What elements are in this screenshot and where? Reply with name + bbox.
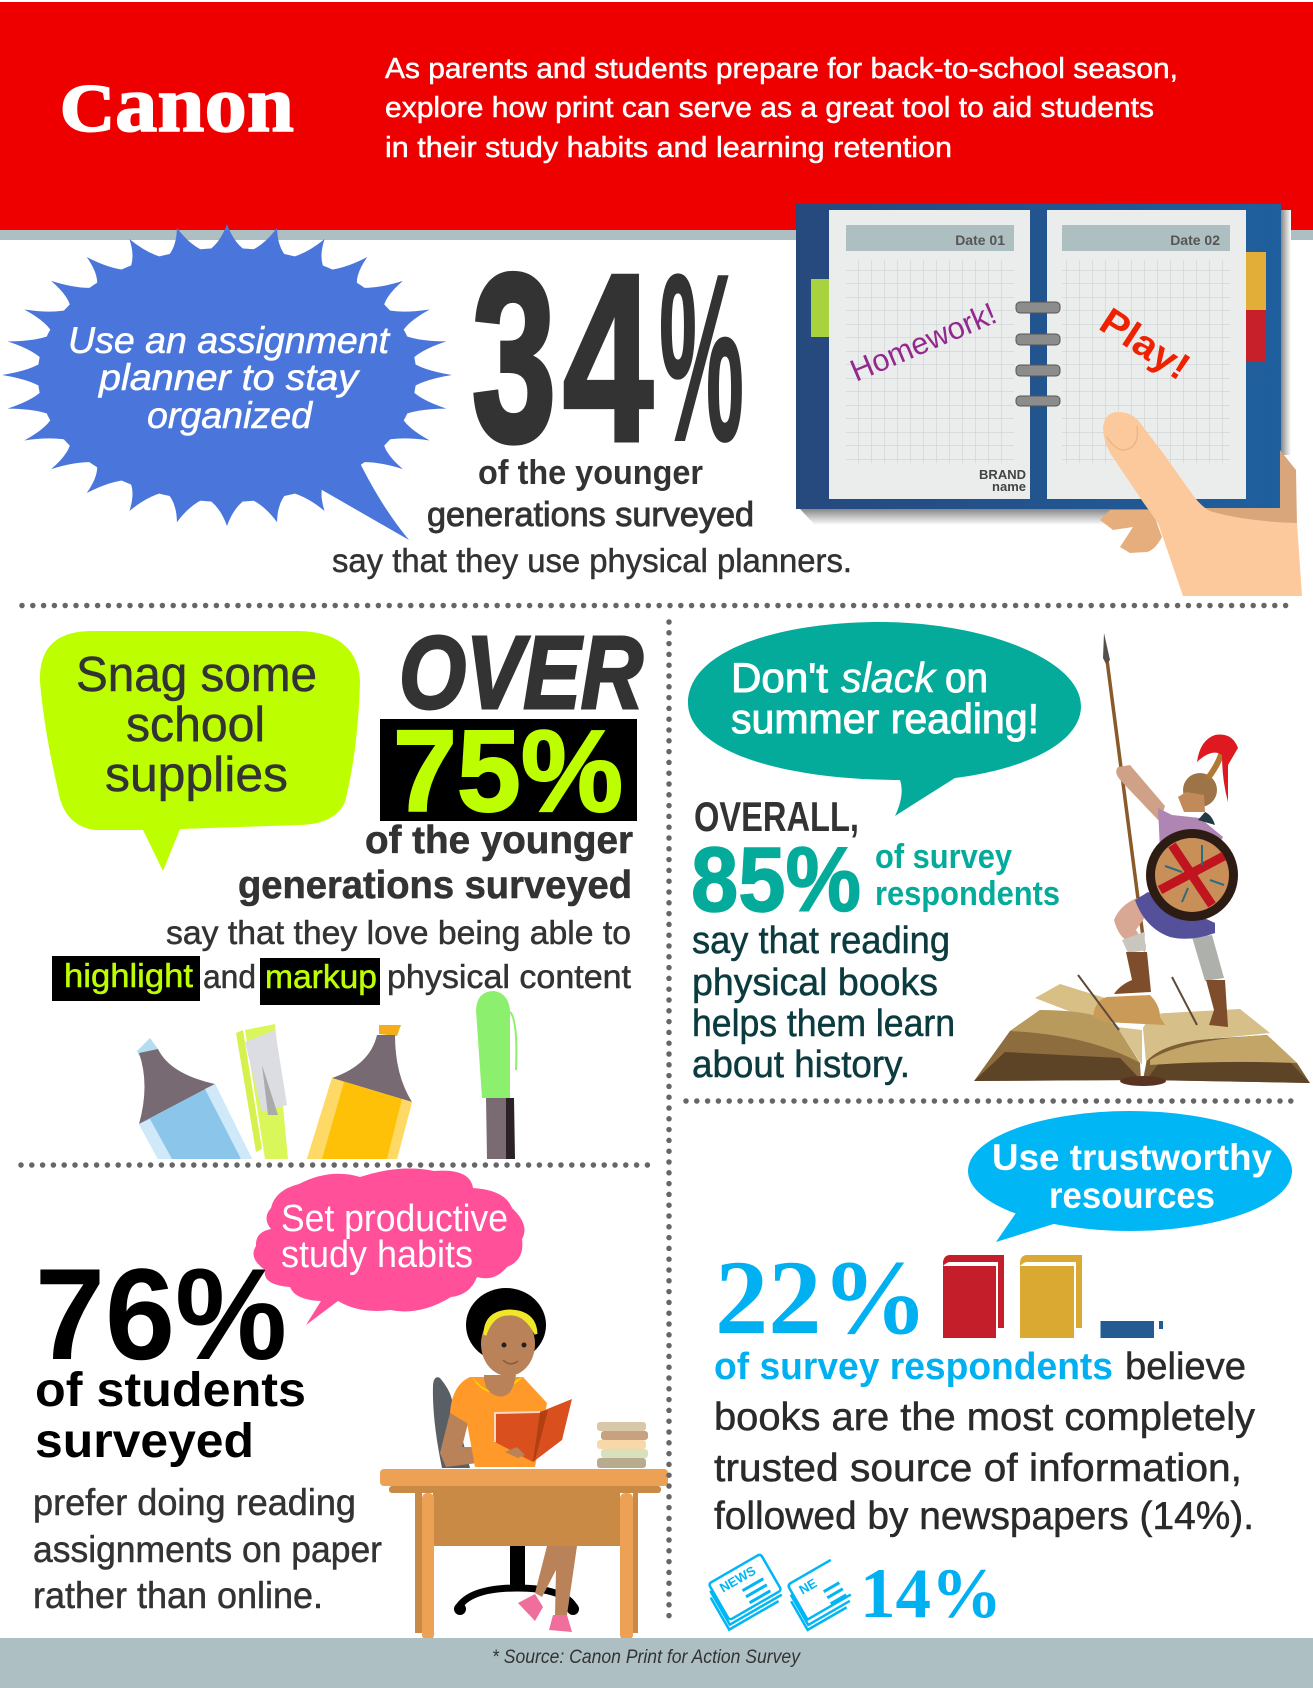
lime speech bubble bbox=[40, 631, 360, 871]
icon: warrior standing on an open book bbox=[974, 633, 1310, 1086]
starburst callout bbox=[2, 224, 452, 540]
cyan speech bubble: resources bbox=[1049, 1175, 1215, 1216]
icon: planner held by a hand: name bbox=[992, 479, 1026, 494]
reading statistic text: helps them learn bbox=[692, 1003, 955, 1045]
planner statistic text: of the younger bbox=[478, 454, 703, 492]
pink cloud bubble: Set productive bbox=[281, 1198, 508, 1240]
34% statistic bbox=[472, 226, 744, 491]
footer source note bbox=[0, 1638, 1313, 1688]
respondents label bbox=[875, 838, 1060, 913]
75% statistic: 75% bbox=[393, 706, 623, 836]
students label: of students bbox=[35, 1364, 306, 1417]
book stack bbox=[597, 1422, 648, 1468]
76% statistic: 76% bbox=[35, 1241, 287, 1387]
34% statistic: 3 bbox=[472, 226, 556, 491]
supplies statistic text: physical content bbox=[387, 958, 631, 995]
planner statistic text: generations surveyed bbox=[427, 496, 754, 534]
OVERALL heading: OVERALL, bbox=[694, 793, 859, 840]
header intro text: explore how print can serve as a great tool to aid students bbox=[385, 92, 1154, 124]
panel: planner tip: % bbox=[659, 226, 744, 491]
supplies statistic text: generations surveyed bbox=[238, 864, 632, 907]
icon: fallen book bbox=[1100, 1321, 1163, 1338]
teal speech bubble: summer reading! bbox=[731, 695, 1039, 742]
lime speech bubble: supplies bbox=[105, 748, 288, 802]
Canon logo: anon bbox=[115, 61, 294, 149]
teal speech bubble: on bbox=[945, 654, 988, 701]
icon: clipped newspaper: NE bbox=[796, 1575, 820, 1597]
supplies statistic text: and bbox=[203, 958, 256, 995]
desk bbox=[380, 1469, 668, 1640]
arrows bbox=[1078, 975, 1197, 1030]
icon: planner held by a hand: Play! bbox=[1092, 300, 1197, 389]
icon: red book bbox=[943, 1255, 1004, 1338]
panel: summer reading bbox=[688, 622, 1310, 1086]
starburst callout: Use an assignment bbox=[68, 320, 391, 361]
students label bbox=[35, 1364, 306, 1468]
trust statistic text bbox=[714, 1346, 1256, 1538]
highlight tag: highlight bbox=[64, 957, 193, 994]
student legs bbox=[535, 1546, 577, 1615]
pink cloud bubble bbox=[253, 1169, 524, 1325]
icon: planner held by a hand: Homework! bbox=[845, 296, 1001, 388]
OVER heading: OVER bbox=[399, 615, 643, 730]
icon: planner held by a hand bbox=[796, 204, 1302, 596]
student body bbox=[440, 1413, 517, 1467]
starburst callout: organized bbox=[147, 395, 313, 436]
trust statistic text: trusted source of information, bbox=[714, 1447, 1242, 1490]
panel: school supplies bbox=[40, 615, 643, 1159]
trust statistic text: followed by newspapers (14%). bbox=[714, 1495, 1254, 1538]
study statistic text bbox=[33, 1482, 382, 1616]
student head bbox=[466, 1288, 546, 1362]
supplies statistic text bbox=[166, 819, 633, 995]
footer source note: * Source: Canon Print for Action Survey bbox=[492, 1647, 801, 1668]
icon: student reading at a desk bbox=[380, 1288, 668, 1640]
markup tag: markup bbox=[265, 958, 377, 995]
figure bbox=[1116, 765, 1165, 822]
highlight tag bbox=[52, 956, 200, 1001]
icon: blue highlighter bbox=[137, 1038, 252, 1159]
planner statistic text bbox=[332, 454, 852, 579]
planner statistic text: say that they use physical planners. bbox=[332, 542, 852, 579]
Canon logo: C bbox=[60, 70, 115, 146]
student book bbox=[495, 1399, 572, 1462]
header intro text bbox=[385, 53, 1178, 164]
panel: planner tip bbox=[2, 204, 1302, 596]
icon: clipped newspaper bbox=[783, 1560, 855, 1630]
icon: newspaper: NEWS bbox=[717, 1563, 759, 1595]
panel: trustworthy resources bbox=[704, 1111, 1292, 1633]
starburst callout: planner to stay bbox=[98, 357, 361, 398]
study statistic text: prefer doing reading bbox=[33, 1482, 356, 1523]
header intro text: in their study habits and learning retention bbox=[385, 132, 952, 164]
supplies statistic text: say that they love being able to bbox=[166, 914, 631, 951]
supplies statistic text: of the younger bbox=[365, 819, 633, 862]
respondents label: of survey bbox=[875, 838, 1012, 876]
14% statistic: 14% bbox=[860, 1555, 1002, 1633]
study statistic text: assignments on paper bbox=[33, 1529, 382, 1570]
study statistic text: rather than online. bbox=[33, 1575, 323, 1616]
icon: yellow highlighter bbox=[307, 1025, 412, 1159]
22% statistic: 22% bbox=[715, 1239, 928, 1356]
icon: lime pen bbox=[236, 1024, 288, 1159]
icon: planner held by a hand: BRAND bbox=[979, 467, 1026, 482]
icon: planner held by a hand: Date 01 bbox=[955, 232, 1005, 248]
lime speech bubble: Snag some bbox=[76, 648, 317, 702]
teal speech bubble: Don't bbox=[731, 654, 828, 701]
spear bbox=[1107, 660, 1143, 937]
trust statistic text: of survey respondents bbox=[714, 1346, 1113, 1388]
teal speech bubble: slack bbox=[841, 654, 937, 701]
open book bbox=[974, 984, 1310, 1086]
reading statistic text: physical books bbox=[692, 962, 938, 1004]
lime speech bubble: school bbox=[126, 698, 265, 752]
icon: green felt pen bbox=[476, 991, 516, 1159]
85% statistic: 85% bbox=[691, 829, 861, 931]
reading statistic text: say that reading bbox=[692, 920, 950, 962]
icon: yellow book bbox=[1020, 1255, 1082, 1338]
reading statistic text bbox=[692, 920, 955, 1086]
panel: study habits bbox=[33, 1169, 668, 1640]
trust statistic text: believe bbox=[1125, 1346, 1246, 1388]
34% statistic: 4 bbox=[563, 226, 653, 491]
chair bbox=[433, 1377, 470, 1468]
cyan speech bubble: Use trustworthy bbox=[992, 1137, 1272, 1178]
cyan speech bubble bbox=[968, 1111, 1292, 1242]
dotted dividers bbox=[21, 606, 1295, 1622]
icon: newspaper bbox=[704, 1554, 785, 1630]
header banner bbox=[0, 2, 1313, 240]
students label: surveyed bbox=[35, 1415, 254, 1468]
trust statistic text: books are the most completely bbox=[714, 1396, 1256, 1439]
respondents label: respondents bbox=[875, 875, 1060, 913]
reading statistic text: about history. bbox=[692, 1044, 910, 1086]
header intro text: As parents and students prepare for back-to-school season, bbox=[385, 53, 1178, 85]
teal speech bubble bbox=[688, 622, 1081, 816]
icon: planner held by a hand: Date 02 bbox=[1170, 232, 1220, 248]
pink cloud bubble: study habits bbox=[281, 1234, 473, 1276]
